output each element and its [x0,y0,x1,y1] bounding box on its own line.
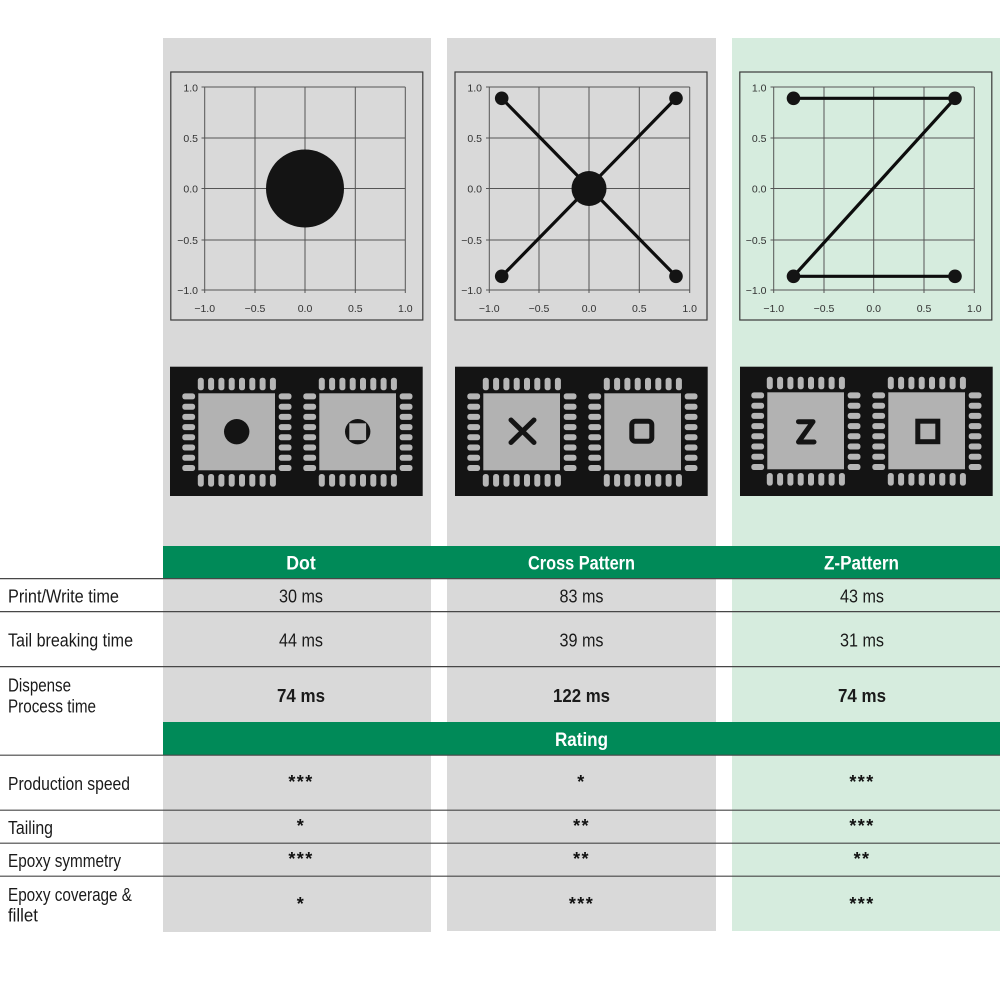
chart: z-pattern: −1.0 [763,303,784,315]
row: tailing: Tailing [8,817,53,838]
row: dispense process time: 122 ms [553,685,610,706]
header bar: rating [163,722,1000,755]
row: print/write time: Print/Write time [8,586,119,607]
row: epoxy symmetry: ** [573,849,590,869]
row: epoxy coverage and fillet: fillet [8,905,38,926]
chart: z-pattern: −1.0 [746,285,767,297]
chart: cross pattern: −1.0 [479,303,500,315]
row: epoxy coverage and fillet: *** [849,894,875,914]
row: tailing: ** [573,816,590,836]
row: production speed: *** [288,772,314,792]
header bar: pattern names [163,546,1000,578]
chart: dot pattern: −1.0 [177,285,198,297]
chip diagram: dot pattern [170,367,423,496]
chart: z-pattern: 0.5 [752,133,767,145]
row: production speed [8,772,875,794]
chart: cross pattern: −0.5 [529,303,550,315]
header bar: rating: Rating [555,730,608,751]
chart: z-pattern: 0.5 [917,303,931,315]
row: tail breaking time: 31 ms [840,630,884,651]
row: dispense process time: Process time [8,695,96,716]
chart: dot pattern: 0.0 [298,303,312,315]
chart: dot pattern: 0.5 [348,303,363,315]
chart: cross pattern: 0.0 [467,184,482,196]
chart: dot pattern: 0.5 [183,133,198,145]
chart: dot pattern: 1.0 [183,82,198,94]
chart: z-pattern: −0.5 [746,235,767,247]
chart: z-pattern: −0.5 [814,303,835,315]
row: epoxy symmetry: *** [288,849,314,869]
row: tailing [8,816,875,838]
chip diagram: z-pattern [740,367,993,496]
row rules [0,579,1000,876]
chart: z-pattern: 0.0 [752,184,767,196]
chart: dot pattern: 1.0 [398,303,413,315]
row: print/write time: 30 ms [279,586,323,607]
chart: dot pattern: −0.5 [245,303,266,315]
row: tail breaking time [8,630,884,651]
row: print/write time: 43 ms [840,586,884,607]
chart: z-pattern: 1.0 [967,303,982,315]
chart: cross pattern: −1.0 [461,285,482,297]
row: epoxy symmetry: ** [854,849,870,869]
row: tail breaking time: 44 ms [279,630,323,651]
panel: cross pattern column [447,38,716,931]
chart: z-pattern [740,72,992,320]
row: print/write time: 83 ms [560,586,604,607]
header bar: pattern names: Cross Pattern [528,554,635,574]
row: production speed: Production speed [8,773,130,794]
panel: dot column [163,38,431,932]
chart: dot pattern [171,72,423,320]
chart: cross pattern: 0.0 [582,303,596,315]
row: print/write time [8,586,884,607]
panel: z-pattern column [732,38,1000,931]
row: tailing: * [297,816,305,836]
chip diagram: cross pattern [455,367,708,496]
row: dispense process time: 74 ms [838,685,886,706]
chart: dot pattern: −1.0 [194,303,215,315]
header bar: pattern names: Dot [286,554,316,574]
row: tail breaking time: Tail breaking time [8,630,133,651]
row: epoxy coverage and fillet: * [297,894,305,914]
row: tail breaking time: 39 ms [560,630,604,651]
chart: cross pattern: 0.5 [467,133,482,145]
row: production speed: *** [849,772,875,792]
row: tailing: *** [849,816,875,836]
row: dispense process time: Dispense [8,675,71,696]
header bar: pattern names: Z-Pattern [824,554,899,574]
row: dispense process time: 74 ms [277,685,325,706]
chart: cross pattern [455,72,707,320]
chart: z-pattern: 1.0 [752,82,767,94]
chart: dot pattern: −0.5 [177,235,198,247]
chart: cross pattern: 1.0 [467,82,482,94]
row: epoxy symmetry: Epoxy symmetry [8,850,122,871]
row: epoxy coverage and fillet: *** [569,894,594,914]
row: epoxy coverage and fillet: Epoxy coverage & [8,884,133,905]
chart: cross pattern: −0.5 [461,235,482,247]
chart: cross pattern: 0.5 [632,303,647,315]
chart: cross pattern: 1.0 [682,303,697,315]
row: dispense process time [8,675,886,716]
chart: z-pattern: 0.0 [866,303,881,315]
row: epoxy symmetry [8,849,870,871]
chart: dot pattern: 0.0 [183,184,198,196]
row: epoxy coverage and fillet [8,884,875,926]
row: production speed: * [577,772,586,792]
